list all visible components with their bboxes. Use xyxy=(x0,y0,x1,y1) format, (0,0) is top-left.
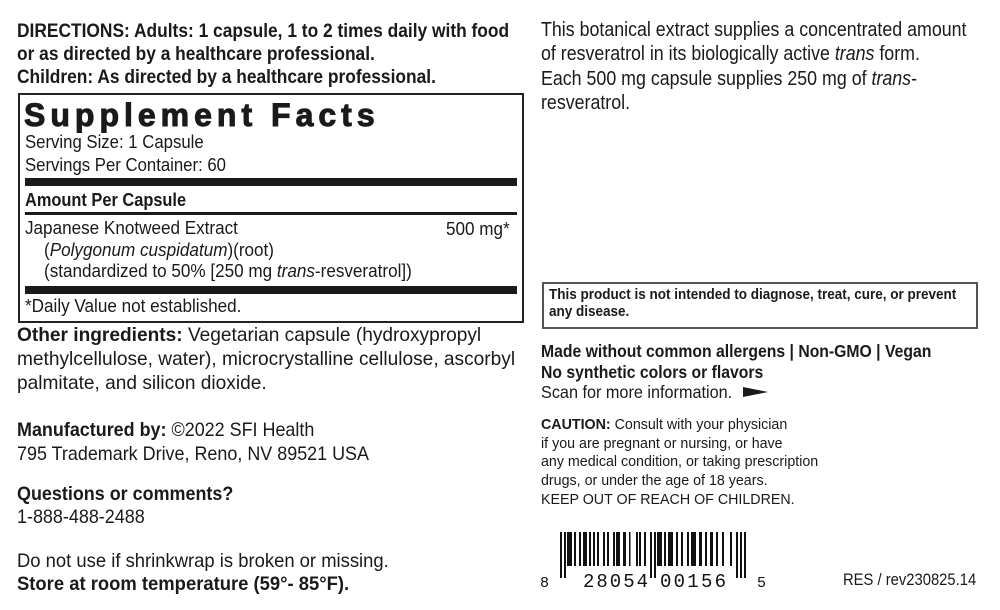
ingredient row: (standardized to 50% [250 mg trans-resveratrol]) xyxy=(44,261,412,281)
barcode: 28054 xyxy=(583,571,648,593)
revision code: RES / rev230825.14 xyxy=(843,570,976,589)
other ingredients: palmitate, and silicon dioxide. xyxy=(17,372,267,394)
disclaimer text: any disease. xyxy=(549,302,629,320)
manufacturer: 795 Trademark Drive, Reno, NV 89521 USA xyxy=(17,443,369,465)
footnote: *Daily Value not established. xyxy=(25,296,241,316)
caution text: KEEP OUT OF REACH OF CHILDREN. xyxy=(541,491,795,508)
manufacturer: Manufactured by: ©2022 SFI Health xyxy=(17,419,314,441)
ingredient row xyxy=(25,218,412,281)
serving info: Servings Per Container: 60 xyxy=(25,155,226,175)
caution text xyxy=(541,416,818,508)
manufacturer xyxy=(17,419,369,465)
disclaimer text: This product is not intended to diagnose, treat, cure, or prevent xyxy=(549,286,956,303)
heading: supplement facts: Supplement Facts xyxy=(24,97,380,133)
description text: resveratrol. xyxy=(541,92,630,114)
icon: arrow xyxy=(743,387,768,397)
directions text block: or as directed by a healthcare professional. xyxy=(17,43,375,65)
questions xyxy=(17,483,233,528)
claims xyxy=(541,341,931,402)
serving info xyxy=(25,132,226,175)
ingredient row: (Polygonum cuspidatum)(root) xyxy=(44,240,274,260)
caution text: if you are pregnant or nursing, or have xyxy=(541,435,783,452)
questions: Questions or comments? xyxy=(17,483,233,505)
claims: Scan for more information. xyxy=(541,382,732,402)
claims: Made without common allergens | Non-GMO | Vegan xyxy=(541,341,931,361)
caution text: any medical condition, or taking prescription xyxy=(541,453,818,470)
questions: 1-888-488-2488 xyxy=(17,506,145,528)
caution text: CAUTION: Consult with your physician xyxy=(541,416,787,433)
storage text: Do not use if shrinkwrap is broken or missing. xyxy=(17,550,389,572)
amount value: 500 mg* xyxy=(446,219,510,239)
description text: Each 500 mg capsule supplies 250 mg of trans- xyxy=(541,68,917,90)
directions text block: DIRECTIONS: Adults: 1 capsule, 1 to 2 times daily with food xyxy=(17,20,509,42)
description text xyxy=(541,19,966,114)
barcode: 00156 xyxy=(660,571,726,593)
directions text block xyxy=(17,20,509,88)
other ingredients: Other ingredients: Vegetarian capsule (hydroxypropyl xyxy=(17,324,481,346)
storage text: Store at room temperature (59°- 85°F). xyxy=(17,573,349,595)
amount per capsule: Amount Per Capsule xyxy=(25,190,186,210)
other ingredients: methylcellulose, water), microcrystalline cellulose, ascorbyl xyxy=(17,348,515,370)
disclaimer box xyxy=(542,282,978,329)
serving info: Serving Size: 1 Capsule xyxy=(25,132,204,152)
storage text xyxy=(17,550,389,595)
other ingredients xyxy=(17,324,515,394)
thick bar xyxy=(25,178,517,186)
panel: supplement facts xyxy=(18,93,524,323)
ingredient row: Japanese Knotweed Extract xyxy=(25,218,238,238)
description text: of resveratrol in its biologically active trans form. xyxy=(541,43,920,65)
caution text: drugs, or under the age of 18 years. xyxy=(541,472,768,489)
disclaimer text xyxy=(549,286,956,320)
directions text block: Children: As directed by a healthcare professional. xyxy=(17,66,436,88)
claims: No synthetic colors or flavors xyxy=(541,362,763,382)
barcode: 8 xyxy=(540,575,549,592)
barcode: 5 xyxy=(757,575,766,592)
description text: This botanical extract supplies a concentrated amount xyxy=(541,19,966,41)
